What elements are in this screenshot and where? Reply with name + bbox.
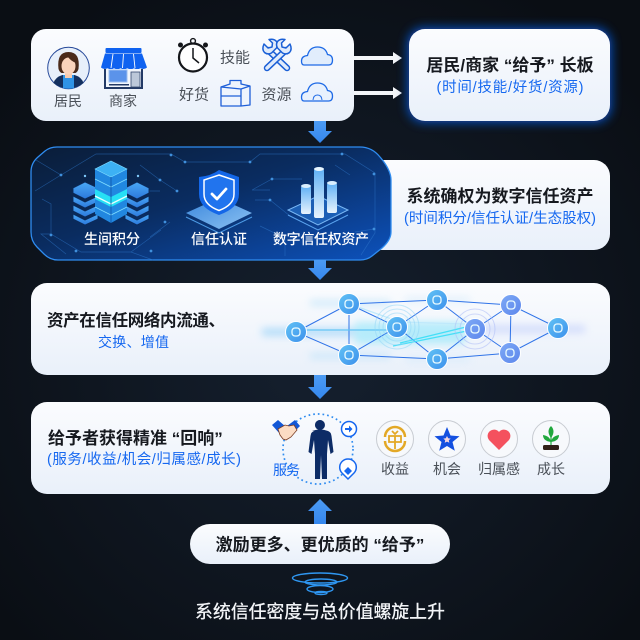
icon: person [308,420,334,479]
label: income: 收益 [381,461,409,477]
icon: location badge [340,459,356,479]
pill: incentive [190,524,450,564]
panel: circulation [31,283,610,375]
text: incentive: 激励更多、更优质的 “给予” [216,534,424,554]
icon: tools [263,39,291,68]
label: merchant: 商家 [109,93,137,109]
label: time points: 生间积分 [84,231,140,247]
label: digital trust equity assets: 数字信任权资产 [273,231,369,247]
label: growth: 成长 [537,461,565,477]
icon: box [221,80,250,106]
panel: residents and merchants [31,29,354,121]
label: belonging: 归属感 [478,461,520,477]
icon: cloud top [302,47,332,65]
arrow: top white arrow [354,52,402,64]
caption: spiral rise: 系统信任密度与总价值螺旋上升 [195,602,445,622]
text: strengths list: (时间/技能/好货/资源) [436,79,584,96]
panel: digital assets [31,147,391,260]
label: resident: 居民 [54,93,82,109]
icon: growth [532,420,570,458]
icon: server stacks [73,161,149,225]
heading: response: 给予者获得精准 “回响” [48,429,223,448]
heading: circulation: 资产在信任网络内流通、 [47,310,225,330]
label: skill: 技能 [220,50,250,66]
chart: trust network [262,290,585,370]
panel: response [31,402,610,494]
arrow: step 1 to 2 [308,121,332,143]
icon: shop [101,48,147,88]
arrow: bottom white arrow [354,87,402,99]
icon: belonging [480,420,518,458]
arrow: step 3 to 4 [308,375,332,399]
heading: strengths: 居民/商家 “给予” 长板 [426,55,594,75]
icon: cloud bottom [302,83,332,101]
panel: strengths [407,27,612,123]
icon: resident avatar [48,47,89,89]
text: asset kinds: (时间积分/信任认证/生态股权) [404,210,596,227]
label: service: 服务 [273,462,300,478]
label: goods: 好货 [179,86,209,104]
icon: spiral [292,573,348,594]
icon: service arrow badge [342,422,356,436]
label: trust certification: 信任认证 [191,231,247,247]
icon: handshake [272,420,300,440]
heading: rights confirmation: 系统确权为数字信任资产 [406,186,594,206]
arrow: step 2 to 3 [308,260,332,280]
icon: column chart on platform [288,167,348,230]
icon: income [376,420,414,458]
arrow: feedback upward [308,499,332,524]
icon: opportunity [428,420,466,458]
icon: shield on platform [186,170,252,233]
icon: clock [178,39,208,72]
label: resources: 资源 [261,86,292,104]
panel: rights confirmation text [370,160,610,250]
icon: dotted orbit [283,414,353,484]
text: response list: (服务/收益/机会/归属感/成长) [47,451,241,468]
label: opportunity: 机会 [433,461,461,477]
text: exchange and appreciation: 交换、增值 [98,334,169,350]
